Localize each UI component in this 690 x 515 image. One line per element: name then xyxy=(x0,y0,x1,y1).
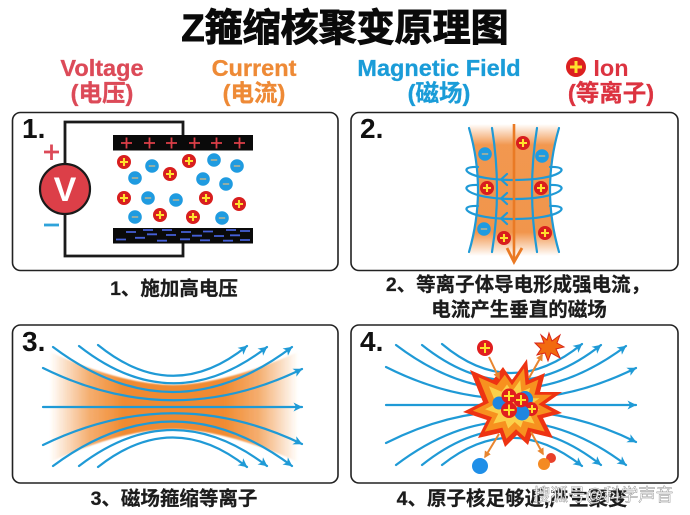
panel number 4: 4. xyxy=(360,326,383,357)
legend: ion xyxy=(566,55,654,106)
panel number 3: 3. xyxy=(22,326,45,357)
watermark: 搜狐号@科学声音 xyxy=(533,485,673,505)
caption 2: 2、等离子体导电形成强电流， xyxy=(386,273,650,296)
panel 3: magnetic field pinches plasma xyxy=(12,325,338,483)
panel number 2: 2. xyxy=(360,113,383,144)
legend: voltage: (电压) xyxy=(71,80,133,106)
neutron xyxy=(472,458,488,474)
caption 2: 电流产生垂直的磁场 xyxy=(431,299,607,321)
positive plate xyxy=(113,135,253,150)
caption 1: 1、施加高电压 xyxy=(110,277,238,300)
legend: voltage xyxy=(60,55,144,106)
title: Z箍缩核聚变原理图 xyxy=(181,8,509,50)
explosion xyxy=(463,359,562,447)
compressed plasma xyxy=(50,352,298,462)
caption 3: 3、磁场箍缩等离子 xyxy=(91,487,257,510)
fusing nuclei xyxy=(492,388,538,420)
magnetic field lines xyxy=(43,345,302,467)
current arrow xyxy=(507,124,522,262)
circuit wire xyxy=(65,122,183,256)
small burst xyxy=(535,333,564,361)
panel 4: fusion xyxy=(351,325,678,483)
legend: ion: Ion xyxy=(593,55,629,81)
ions in plasma xyxy=(477,136,552,245)
helium product xyxy=(538,453,556,470)
panel 2: plasma current and magnetic field xyxy=(351,112,678,270)
legend: voltage: Voltage xyxy=(60,55,144,81)
legend: magnetic field: (磁场) xyxy=(408,80,470,106)
panel number 1: 1. xyxy=(22,113,45,144)
voltage source: V xyxy=(54,171,77,209)
legend: current: Current xyxy=(212,55,297,81)
legend: magnetic field xyxy=(357,55,521,106)
voltage source xyxy=(40,164,90,214)
positive ions xyxy=(117,154,246,224)
legend: ion: (等离子) xyxy=(568,80,654,106)
reaction arrows xyxy=(485,355,543,457)
magnetic field lines xyxy=(386,344,636,466)
legend: magnetic field: Magnetic Field xyxy=(357,55,521,81)
polarity plus xyxy=(44,144,59,160)
negative ions xyxy=(128,153,244,225)
legend: current: (电流) xyxy=(223,80,285,106)
negative plate xyxy=(113,228,253,244)
incoming ion xyxy=(477,340,493,356)
plasma column xyxy=(469,124,559,256)
caption 4: 4、原子核足够近,产生聚变 xyxy=(397,487,627,510)
panel 1: apply high voltage xyxy=(12,112,338,270)
legend: current xyxy=(212,55,297,106)
magnetic rings xyxy=(466,167,562,224)
caption 2 xyxy=(386,273,650,321)
field lines vertical xyxy=(469,128,559,252)
polarity minus xyxy=(44,224,59,226)
